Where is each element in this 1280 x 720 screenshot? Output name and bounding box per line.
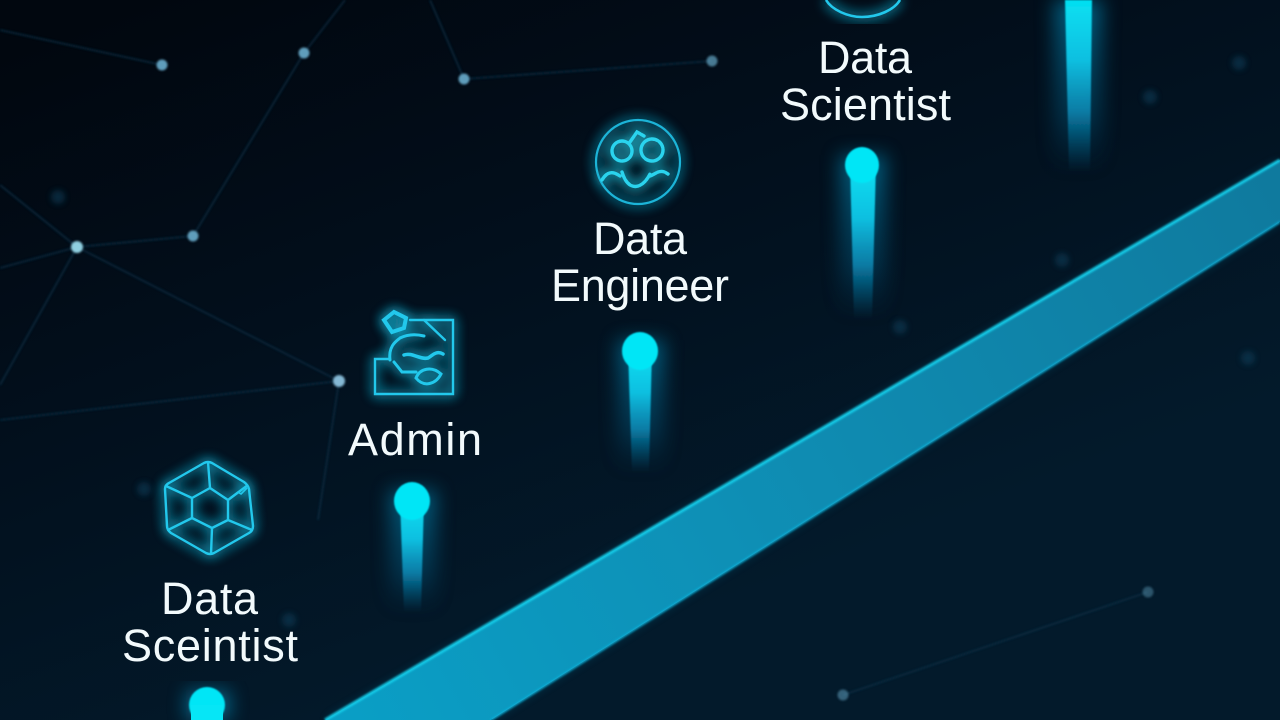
icon: circle with gears	[596, 120, 680, 204]
icon: hexagon	[165, 462, 253, 554]
label: Data Sceintist	[122, 573, 298, 671]
marker	[840, 147, 886, 319]
label: Data Sceintist: Data	[161, 573, 259, 624]
icon: cropped top icon	[826, 0, 900, 17]
label: Data Scientist	[780, 32, 951, 130]
label: Data Engineer	[551, 213, 729, 311]
label: Data Sceintist: Sceintist	[122, 620, 298, 671]
label: Data Scientist: Scientist	[780, 79, 951, 130]
diagonal growth band	[325, 160, 1280, 720]
label: Data Engineer: Engineer	[551, 260, 729, 311]
label: Data Scientist: Data	[818, 32, 913, 83]
icon: admin document	[375, 312, 453, 394]
marker	[390, 482, 436, 612]
step 2: Admin	[348, 312, 482, 612]
marker	[618, 332, 664, 472]
label: Data Engineer: Data	[593, 213, 688, 264]
step 1: Data Sceintist	[122, 462, 298, 720]
step 5: top marker	[1054, 0, 1102, 172]
step 3: Data Engineer	[551, 120, 729, 472]
step 4: Data Scientist	[780, 0, 951, 319]
marker	[186, 687, 230, 720]
label: Admin: Admin	[348, 414, 482, 465]
